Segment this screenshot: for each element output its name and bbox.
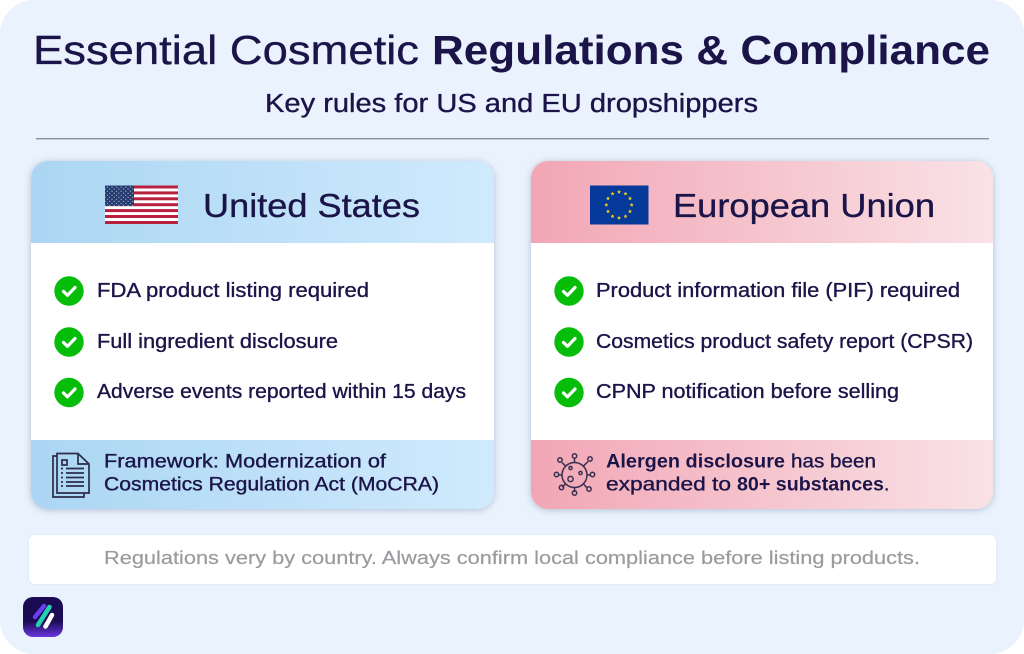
icon: allergen virus bbox=[554, 454, 595, 495]
checklist: US bbox=[54, 276, 466, 407]
callout: allergen disclosure: . bbox=[884, 474, 889, 496]
panel: United States bbox=[31, 161, 494, 509]
subtitle: Key rules for US and EU dropshippers bbox=[265, 90, 758, 118]
icon: EU flag bbox=[590, 186, 648, 224]
item: FDA listing: FDA product listing required bbox=[97, 280, 369, 302]
title: Regulations & Compliance bbox=[432, 27, 990, 73]
checklist: EU bbox=[554, 276, 973, 407]
item: ingredient disclosure: Full ingredient disclosure bbox=[97, 331, 338, 353]
heading: European Union: European Union bbox=[673, 188, 935, 225]
item: PIF: Product information file (PIF) required bbox=[596, 280, 960, 302]
item: PIF bbox=[554, 276, 960, 306]
callout: allergen disclosure: 80+ substances bbox=[737, 474, 884, 496]
callout: allergen disclosure: has been bbox=[791, 452, 876, 472]
callout: allergen disclosure bbox=[606, 452, 889, 496]
callout: framework: Framework: Modernization of bbox=[104, 452, 387, 472]
item: CPNP bbox=[554, 378, 899, 407]
item: adverse events: Adverse events reported within 15 days bbox=[97, 381, 466, 403]
note bar bbox=[29, 535, 996, 584]
callout: framework bbox=[104, 452, 439, 496]
panel: European Union bbox=[531, 161, 993, 509]
item: adverse events bbox=[54, 378, 466, 407]
icon: logo bbox=[23, 597, 63, 637]
heading: United States: United States bbox=[203, 188, 420, 225]
item: FDA listing bbox=[54, 276, 369, 306]
item: CPSR: Cosmetics product safety report (CPSR) bbox=[596, 331, 973, 353]
title bbox=[33, 27, 990, 73]
callout: allergen disclosure: Alergen disclosure bbox=[606, 452, 785, 472]
icon: document bbox=[53, 454, 89, 497]
note bar: Regulations very by country. Always confirm local compliance before listing products. bbox=[104, 547, 920, 568]
title: Essential Cosmetic bbox=[33, 27, 419, 73]
icon: US flag bbox=[105, 186, 178, 224]
callout: framework: Cosmetics Regulation Act (MoCRA) bbox=[104, 474, 439, 496]
callout: allergen disclosure: expanded to bbox=[606, 474, 731, 496]
item: ingredient disclosure bbox=[54, 327, 338, 357]
item: CPNP: CPNP notification before selling bbox=[596, 381, 899, 403]
item: CPSR bbox=[554, 327, 973, 357]
